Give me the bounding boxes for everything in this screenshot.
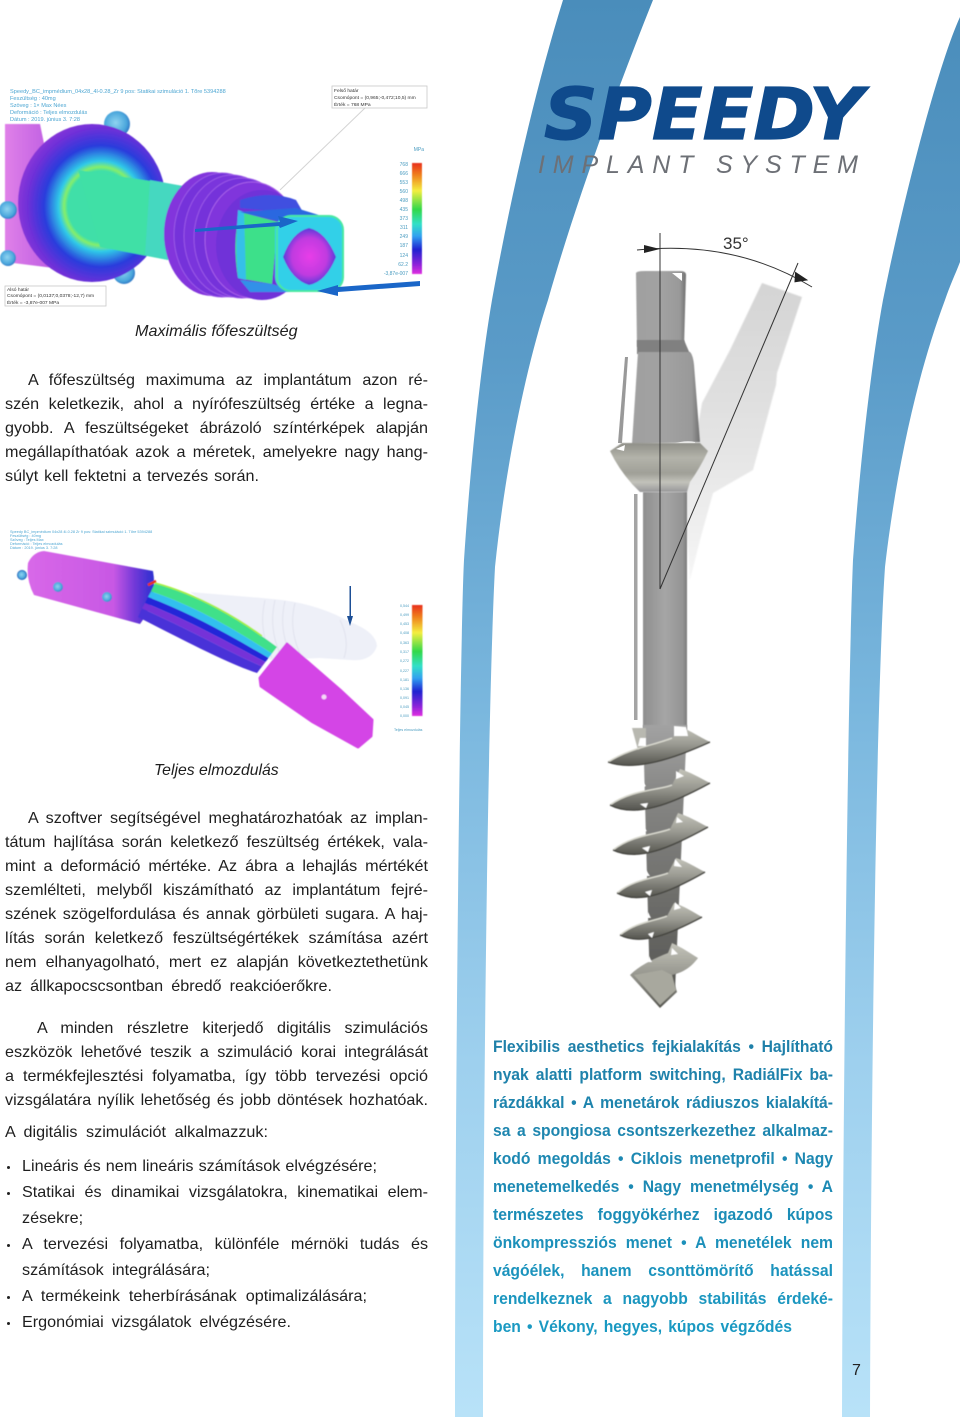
text block: principal stress: megállapíthatóak azok a méretek, amelyekre nagy hang- [5,444,428,461]
caption: maximum principal stress: Maximális főfeszültség [135,323,298,340]
displacement colour legend: 0,091 [400,696,409,700]
caption: total displacement: Teljes elmozdulás [154,762,279,779]
left blue swoosh band [455,0,653,1417]
shaft [643,492,687,730]
simulation header: Szöveg : 1× Max Nées [10,103,67,109]
stress colour legend: 373 [400,216,408,222]
text block: digital simulation: vizsgálatára nyílik lehetőség és jobb döntések hozhatóak. [5,1092,428,1109]
callout: upper limit: Felső határ [334,88,359,94]
threaded core [643,725,687,990]
displacement colour legend: 0,227 [400,669,409,673]
displacement colour legend: 0,408 [400,631,409,635]
callout: upper limit [332,86,427,108]
simulation header: Dátum : 2019. június 3. 7:28 [10,117,80,123]
feature list: blue text: önkompressziós menet • A menetélek nem [493,1234,833,1252]
bent neck: displacement bands [138,583,277,673]
feature list: blue text: vágóélek, hanem csonttömörítő hatással [493,1262,833,1280]
feature list: blue text: rendelkeznek a nagyobb stabilitás érdeké- [493,1290,833,1308]
bullet list: uses of simulation [7,1158,428,1331]
simulation header: Dátum : 2019. június 3. 7:28 [10,546,58,550]
list intro: A digitális szimulációt alkalmazzuk: [5,1124,268,1141]
feature list: blue text: természetes foggyökérhez igazodó kúpos [493,1206,833,1224]
bullet list: uses of simulation: A termékeink teherbírásának optimalizálására; [22,1288,367,1305]
angle measurement lines [637,233,812,589]
feature list: blue text: sa a spongiosa csontszerkezethez alkalmaz- [493,1122,833,1140]
feature list: blue text [493,1038,833,1336]
cone sliver [618,357,628,443]
arrow: lower load [317,281,420,296]
text block: software analysis: szemlélteti, melyből kiszámítható az implantátum fejré- [5,882,428,899]
simulation header: Szöveg : Teljes Max [10,538,44,542]
green shaft [78,170,183,260]
displacement colour legend: Teljes elmozdulás [394,728,423,732]
logo: Speedy Implant System [538,73,870,179]
simulation header: Speedy BC_impmédium 04x28 4l-0.28 Zr 9 pos: Statikai szimuláció 1. Tőre 5394288 [10,530,152,534]
text block: software analysis: nem elhanyagolható, mert ez alapján következtethetünk [5,954,428,971]
displacement colour legend [394,604,423,732]
displacement colour legend: 0,499 [400,613,409,617]
stress colour legend: 666 [400,171,408,177]
arrow: applied load [347,586,353,626]
callout: lower limit: Érték = -3,87e-007 MPa [7,299,59,306]
displacement colour legend: 0,045 [400,705,409,709]
callout: lower limit [5,286,106,306]
simulation header: Deformáció : Teljes elmozdulás [10,542,63,546]
displacement colour legend: 0,363 [400,641,409,645]
feature list: blue text: nyak alatti platform switching, RadiálFix ba- [493,1066,833,1084]
arrowhead: left [644,245,660,253]
text block: software analysis: mint a deformáció mértéke. Az ábra a lehajlás mértékét [5,858,428,875]
bullet list: uses of simulation: A tervezési folyamatba, különféle mérnöki tudás és [22,1236,428,1253]
displacement colour legend: 0,000 [400,714,409,718]
stress colour legend: 560 [400,189,408,195]
right blue swoosh band [842,17,960,1417]
bullet list: uses of simulation: zésekre; [22,1210,83,1227]
bullet list: uses of simulation: Statikai és dinamikai vizsgálatokra, kinematikai elem- [22,1184,428,1201]
callout: lower limit: Alsó határ [7,287,29,293]
simulation header [10,89,226,123]
undeformed ghost implant [190,592,377,660]
square neck face [275,216,343,291]
simulation header: Feszültség : 40mg [10,96,56,102]
screw thread fins [608,726,710,1008]
stress colour legend: 62.2 [398,262,408,268]
text block: digital simulation: A minden részletre kiterjedő digitális szimulációs [37,1020,428,1037]
simulation header [10,530,152,550]
tilted ghost abutment [685,283,802,580]
stress colour legend: 498 [400,198,408,204]
callout: lower limit: Csomópont = (0,0137;0,0378;-12,7) mm [7,293,94,299]
figure: maximum principal stress simulation [0,86,427,306]
text block: software analysis [5,810,428,995]
text block: principal stress: súlyt kell fektetni a tervezés során. [5,468,259,485]
implant illustration with 35 degree angulation [608,233,812,1008]
stress colour legend: 768 [400,162,408,168]
simulation header: Deformáció : Teljes elmozdulás [10,110,88,116]
text block: digital simulation: eszközök lehetővé teszik a szimuláció korai integrálását [5,1044,428,1061]
abutment neck [636,271,686,347]
callout: upper limit: Érték = 768 MPa [334,101,371,108]
stress colour legend: 249 [400,234,408,240]
stress colour legend: 187 [400,243,408,249]
page number: 7 [852,1362,861,1379]
feature list: blue text: menetemelkedés • Nagy menetmélység • A [493,1178,833,1196]
simulation header: Feszültség : 40mg [10,534,41,538]
rear cylinder [5,124,70,270]
fixed cylinder [28,551,154,624]
large stress disc [18,124,166,282]
shaft highlight strip [634,494,638,720]
text block: software analysis: tátum hajlítása során keletkező feszültség értékek, vala- [5,834,428,851]
stress colour legend: 435 [400,207,408,213]
callout: upper limit: Csomópont = (0,965;-0,472;10,5) mm [334,95,416,101]
figure: total displacement simulation [10,530,423,747]
text block: principal stress: A főfeszültség maximuma az implantátum azon ré- [28,372,428,389]
text block: digital simulation [5,1020,428,1109]
bullet list: uses of simulation: Lineáris és nem lineáris számítások elvégzésére; [22,1158,377,1175]
bullet list: uses of simulation: Ergonómiai vizsgálatok elvégzésére. [22,1314,291,1331]
logo tagline: IMPLANT SYSTEM [538,151,858,179]
arrow: upper load [195,216,298,232]
feature list: blue text: ben • Vékony, hegyes, kúpos végződés [493,1318,792,1336]
text block: software analysis: szének szögelfordulása és annak görbületi sugara. A haj- [5,906,428,923]
stress colour legend: -3,87e-007 [384,271,408,277]
deflected threaded implant [260,644,372,747]
displacement colour legend: 0,181 [400,678,409,682]
simulation header: Speedy_BC_impmédium_04x28_4l-0.28_Zr 9 pos: Statikai szimuláció 1. Tőre 5394288 [10,89,226,95]
displacement colour legend: 0,544 [400,604,409,608]
threaded head [164,172,260,296]
feature list: blue text: kodó megoldás • Ciklois menetprofil • Nagy [493,1150,833,1168]
text block: software analysis: A szoftver segítségével meghatározhatóak az implan- [28,810,428,827]
stress colour legend: 311 [400,225,408,231]
stress colour legend: 124 [400,253,408,259]
text block: software analysis: az állkapocscsontban ébredő reakcióerőkre. [5,978,332,995]
text block: principal stress: gyobb. A feszültségeket ábrázoló színtérképek alapján [5,420,428,437]
feature list: blue text: rázdákkal • A menetárok rádiuszos kialakítá- [493,1094,833,1112]
displacement colour legend: 0,317 [400,650,409,654]
arrowhead: right [790,268,808,287]
abutment cone [632,352,700,444]
logo wordmark: SPEEDY [544,73,870,156]
diamond socket [283,228,336,285]
stress colour legend [384,147,424,277]
feature list: blue text: Flexibilis aesthetics fejkialakítás • Hajlítható [493,1038,833,1056]
displacement colour legend: 0,453 [400,622,409,626]
text block: principal stress: szén keletkezik, ahol a nyírófeszültség értéke a legna- [5,396,428,413]
leader line [280,108,365,190]
displacement colour legend: 0,272 [400,659,409,663]
text block: principal stress [5,372,428,485]
displacement colour legend: 0,136 [400,687,409,691]
angle label: 35° [723,234,749,253]
text block: software analysis: lítás során keletkező feszültségértékek számítása azért [5,930,428,947]
collar [610,443,708,492]
stress colour legend: 553 [400,180,408,186]
text block: digital simulation: a termékfejlesztési folyamatba, így több tervezési opció [5,1068,428,1085]
bullet list: uses of simulation: számítások integrálására; [22,1262,210,1279]
top glints [672,273,682,281]
stress colour legend: MPa [414,147,424,153]
